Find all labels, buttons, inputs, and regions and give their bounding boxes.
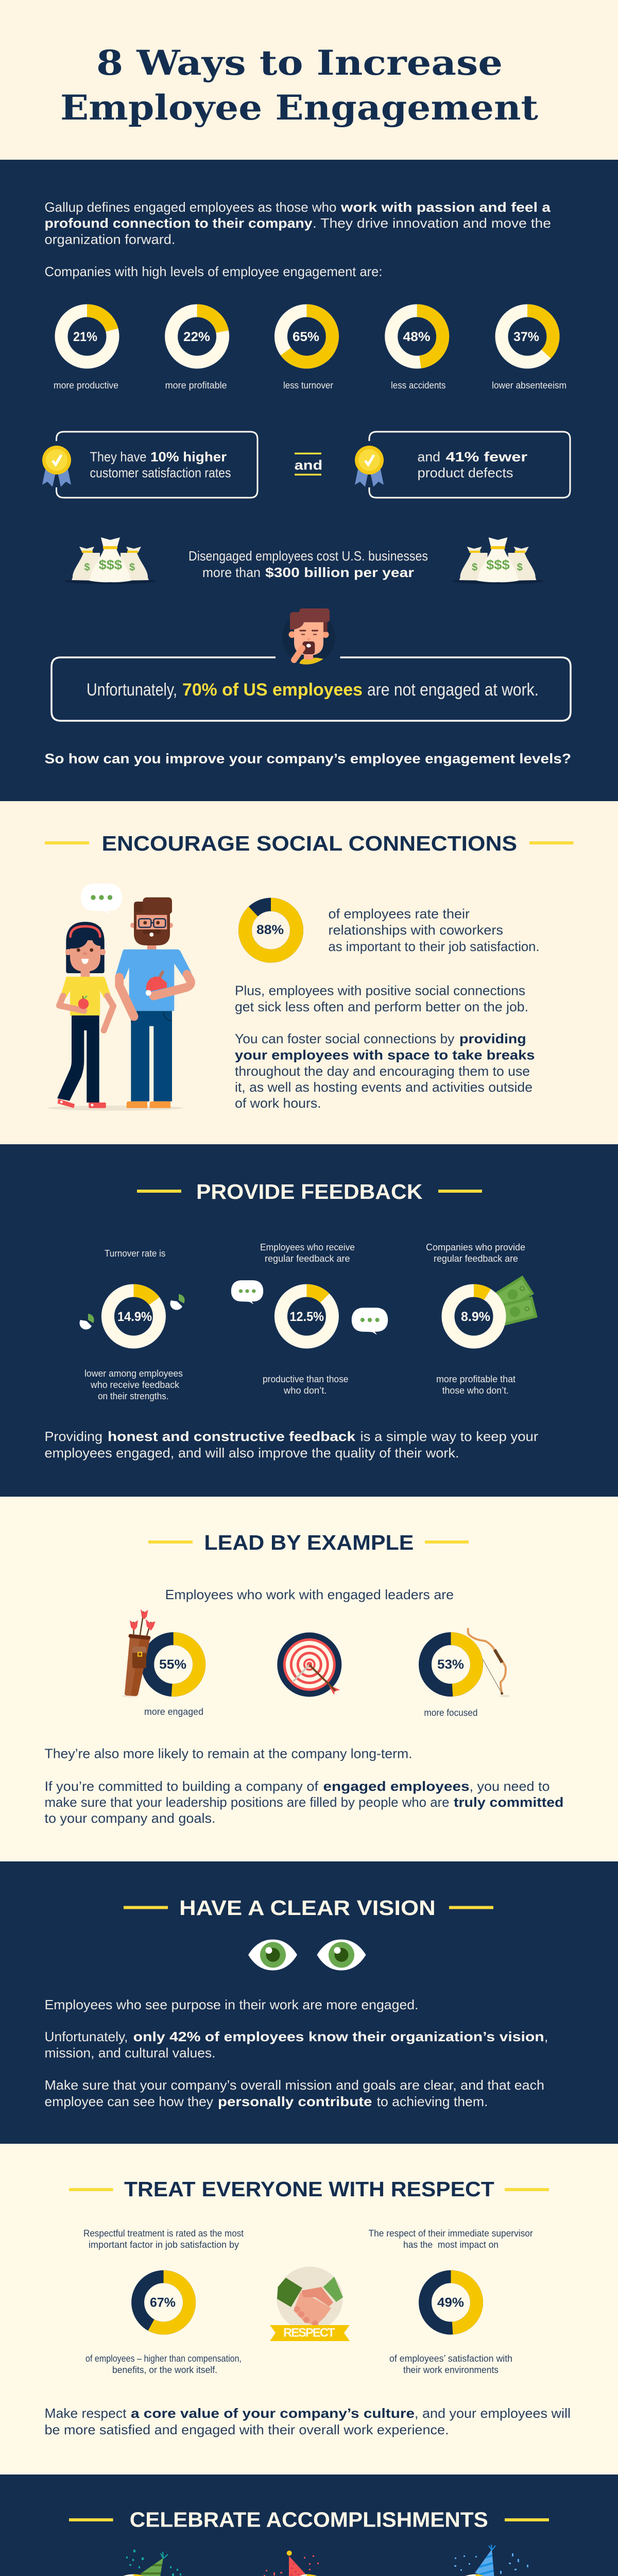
text block: feedback summary: Providing — [44, 1429, 102, 1444]
heading: HAVE A CLEAR VISION — [179, 1896, 436, 1920]
stat: 67% job satisfaction: benefits, or the work itself. — [112, 2365, 217, 2375]
intro text block: Gallup defines engaged employees as those who — [44, 199, 337, 215]
donut: 48% less accidents: less accidents — [391, 380, 446, 391]
icon: dollar bills — [491, 1276, 538, 1326]
panel: provide feedback — [0, 1144, 618, 1497]
donut: 65% less turnover: less turnover — [283, 380, 333, 391]
callout: 70% of US employees: 70% of US employees — [182, 680, 363, 700]
stat: 12.5% productive — [231, 1242, 388, 1396]
text block: social connections: as important to their job satisfaction. — [329, 939, 540, 954]
connector: and — [295, 452, 322, 476]
text block: respect summary: Make respect — [44, 2405, 127, 2421]
panel: introduction — [0, 160, 618, 801]
stat: 49% supervisor: their work environments — [403, 2365, 499, 2375]
woman — [57, 922, 113, 1108]
text block: vision: Employees who see purpose in their work are more engaged. — [44, 1997, 418, 2012]
text: cost of disengagement: $300 billion per year — [265, 565, 414, 580]
stat: 8.9% profitable: more profitable that — [436, 1374, 516, 1384]
stat: 67% job satisfaction: important factor in job satisfaction by — [89, 2240, 239, 2250]
stat: 49% supervisor: has the most impact on — [403, 2240, 499, 2250]
stat: 67% job satisfaction: of employees – higher than compensation, — [85, 2353, 242, 2364]
donut: 53% more focused: more focused — [424, 1708, 477, 1718]
donut: 21% more productive: 21% — [73, 330, 97, 344]
text block: respect summary: a core value of your company’s culture — [131, 2405, 415, 2421]
icon: small pie charts — [79, 1294, 185, 1330]
intro text block: organization forward. — [44, 232, 175, 247]
callout: 41% fewer product defects: product defects — [417, 465, 513, 480]
heading: PROVIDE FEEDBACK — [196, 1180, 423, 1204]
donut: 48% less accidents: 48% — [403, 330, 431, 344]
text block: vision: only 42% of employees know their organization’s vision — [133, 2029, 544, 2044]
donut: 55% more engaged: more engaged — [144, 1707, 203, 1717]
icon: money bags right — [452, 537, 544, 584]
stat: 14.9% turnover: lower among employees — [84, 1368, 183, 1379]
donut: 37% lower absenteeism — [492, 311, 566, 391]
donut: 22% more profitable — [165, 311, 227, 391]
intro text block: work with passion and feel a — [340, 199, 551, 215]
stat: 8.9% profitable: 8.9% — [461, 1310, 490, 1324]
heading — [148, 1531, 469, 1554]
text block: social connections: providing — [459, 1031, 526, 1046]
text block: vision — [44, 1997, 548, 2109]
text block: feedback summary: is a simple way to keep your — [360, 1429, 538, 1444]
text block: social connections: Plus, employees with positive social connections — [235, 983, 525, 998]
icon: blue party hat with confetti — [454, 2545, 528, 2576]
stat: 49% supervisor: The respect of their immediate supervisor — [369, 2228, 533, 2239]
icon: red party hat with confetti — [264, 2551, 319, 2576]
callout: 41% fewer product defects: 41% fewer — [446, 449, 527, 464]
heading: LEAD BY EXAMPLE — [204, 1531, 414, 1554]
text: intro line: Employees who work with engaged leaders are — [165, 1587, 454, 1602]
stat: 8.9% profitable: Companies who provide — [426, 1242, 525, 1252]
text block: respect summary — [44, 2405, 571, 2437]
icon: green party hat with confetti — [126, 2550, 181, 2576]
donut: 55% more engaged — [144, 1639, 203, 1717]
panel: have a clear vision — [0, 1861, 618, 2144]
stat: 8.9% profitable — [426, 1242, 538, 1396]
donut: 65% less turnover: 65% — [293, 330, 319, 344]
text block: social connections: of work hours. — [235, 1095, 321, 1111]
callout: 10% higher customer satisfaction: 10% higher — [150, 449, 227, 464]
text block: vision: Unfortunately, — [44, 2029, 128, 2044]
donut: 55% more engaged: 55% — [159, 1657, 186, 1672]
stat: 8.9% profitable: those who don’t. — [442, 1385, 509, 1396]
title: Employee Engagement — [60, 88, 539, 128]
stat: 14.9% turnover: 14.9% — [117, 1310, 152, 1324]
man — [115, 897, 192, 1108]
text: cost of disengagement: Disengaged employees cost U.S. businesses — [188, 548, 428, 564]
title: 8 Ways to Increase — [96, 43, 503, 83]
stat: 14.9% turnover: Turnover rate is — [105, 1248, 165, 1259]
intro text block: . They drive innovation and move the — [313, 215, 551, 231]
stat: 49% supervisor: 49% — [437, 2296, 464, 2310]
callout: 41% fewer product defects — [355, 432, 570, 498]
intro text block — [44, 199, 551, 279]
donut: 88% — [245, 905, 297, 956]
text block: vision: , — [544, 2029, 548, 2044]
heading — [137, 1180, 482, 1204]
donut: 22% more profitable: 22% — [183, 330, 210, 344]
text block: vision: Make sure that your company’s overall mission and goals are clear, and that each — [44, 2077, 544, 2093]
stat: 94% — [123, 2550, 181, 2576]
callout: 10% higher customer satisfaction: They have — [90, 449, 146, 464]
stat: 89% — [246, 2551, 365, 2576]
text block: leadership: make sure that your leadership positions are filled by people who are — [44, 1794, 449, 1810]
heading — [124, 1896, 493, 1920]
stat: 8.9% profitable: regular feedback are — [434, 1253, 518, 1264]
panel: title banner — [0, 0, 618, 160]
text block: vision: to achieving them. — [377, 2094, 488, 2109]
donut: 65% less turnover — [281, 311, 333, 391]
donut: 88%: 88% — [256, 923, 284, 937]
icon: money bags left: $$$ — [99, 557, 123, 572]
icon: medal — [42, 446, 71, 487]
text block: leadership: If you’re committed to building a company of — [44, 1778, 319, 1794]
callout: 10% higher customer satisfaction: customer satisfaction rates — [90, 465, 231, 480]
text block: social connections: your employees with space to take breaks — [235, 1047, 535, 1063]
text block: respect summary: , and your employees will — [415, 2405, 571, 2421]
callout: 70% of US employees — [52, 657, 571, 721]
text: cost of disengagement: more than — [202, 565, 261, 580]
callout: 70% of US employees: Unfortunately, — [87, 680, 177, 700]
stat: 74% — [454, 2544, 528, 2576]
illustration: two coworkers talking — [47, 884, 192, 1111]
text block: leadership — [44, 1746, 563, 1826]
icon: money bags left: $ — [129, 562, 135, 573]
text block: leadership: truly committed — [454, 1794, 563, 1810]
text block: social connections: relationships with coworkers — [329, 922, 503, 938]
icon: quiver of arrows — [122, 1609, 156, 1697]
heading: CELEBRATE ACCOMPLISHMENTS — [130, 2508, 488, 2532]
icon: thinking man — [282, 608, 335, 665]
text block: feedback summary — [44, 1429, 538, 1461]
icon: left eye — [248, 1939, 297, 1970]
text block: vision: personally contribute — [218, 2094, 372, 2109]
donut: 37% lower absenteeism: lower absenteeism — [492, 380, 566, 391]
icon: handshake with respect ribbon: RESPECT — [283, 2326, 335, 2340]
text block: social connections: get sick less often and perform better on the job. — [235, 999, 528, 1014]
text block: social connections: throughout the day and encouraging them to use — [235, 1063, 530, 1079]
panel: treat everyone with respect — [0, 2144, 618, 2475]
donut: 37% lower absenteeism: 37% — [513, 330, 539, 344]
icon: medal — [355, 446, 384, 487]
title — [60, 43, 539, 128]
icon: handshake with respect ribbon — [270, 2267, 350, 2341]
stat: 12.5% productive: 12.5% — [289, 1310, 324, 1324]
text block: feedback summary: employees engaged, and will also improve the quality of their work. — [44, 1445, 459, 1461]
text block: leadership: engaged employees — [323, 1778, 470, 1794]
icon: money bags right: $ — [517, 562, 523, 573]
stat: 14.9% turnover — [79, 1248, 185, 1401]
text block: vision: mission, and cultural values. — [44, 2045, 215, 2060]
heading: ENCOURAGE SOCIAL CONNECTIONS — [102, 832, 517, 855]
callout: 10% higher customer satisfaction — [42, 432, 258, 498]
text block: feedback summary: honest and constructive feedback — [108, 1429, 356, 1444]
donut: 22% more profitable: more profitable — [165, 380, 227, 391]
intro text block: profound connection to their company — [44, 215, 313, 231]
donut: 48% less accidents — [391, 311, 446, 391]
text block: social connections — [235, 906, 540, 1111]
panel: lead by example — [0, 1497, 618, 1861]
text block: social connections: it, as well as hosting events and activities outside — [235, 1079, 533, 1095]
icon: money bags right: $ — [472, 562, 477, 573]
stat: 12.5% productive: Employees who receive — [260, 1242, 355, 1252]
stat: 14.9% turnover: on their strengths. — [98, 1391, 169, 1401]
icon: bow — [468, 1628, 510, 1697]
panel: celebrate accomplishments — [0, 2475, 618, 2576]
closing question: So how can you improve your company’s employee engagement levels? — [44, 751, 571, 767]
callout: 41% fewer product defects: and — [417, 449, 440, 464]
text block: social connections: You can foster social connections by — [235, 1031, 454, 1046]
icon: money bags left — [64, 537, 156, 584]
intro text block: Companies with high levels of employee engagement are: — [44, 264, 382, 279]
text block: leadership: , you need to — [470, 1778, 550, 1794]
donut: 53% more focused — [424, 1639, 477, 1718]
icon: target with arrow — [277, 1632, 341, 1697]
stat: 49% supervisor — [369, 2228, 533, 2375]
panel: encourage social connections — [0, 801, 618, 1144]
icon: right eye — [317, 1939, 366, 1970]
text block: leadership: to your company and goals. — [44, 1810, 215, 1826]
stat: 49% supervisor: of employees’ satisfaction with — [389, 2353, 512, 2364]
stat: 12.5% productive: who don’t. — [283, 1385, 327, 1396]
donut: 21% more productive: more productive — [54, 380, 118, 391]
icon: speech bubbles — [231, 1280, 388, 1335]
connector: and: and — [295, 457, 322, 473]
icon: money bags right: $$$ — [486, 557, 510, 572]
stat: 14.9% turnover: who receive feedback — [90, 1380, 180, 1390]
stat: 12.5% productive: productive than those — [263, 1374, 348, 1384]
callout: 70% of US employees: are not engaged at work. — [367, 680, 539, 700]
text block: vision: employee can see how they — [44, 2094, 213, 2109]
text block: respect summary: be more satisfied and engaged with their overall work experience. — [44, 2422, 449, 2437]
text block: leadership: They’re also more likely to remain at the company long-term. — [44, 1746, 412, 1761]
stat: 67% job satisfaction: 67% — [150, 2296, 176, 2310]
icon: money bags left: $ — [84, 562, 90, 573]
text block: social connections: of employees rate their — [329, 906, 470, 922]
icon: speech bubble — [81, 884, 122, 914]
donut: 21% more productive — [54, 311, 118, 391]
heading: TREAT EVERYONE WITH RESPECT — [124, 2177, 494, 2201]
text: cost of disengagement — [188, 548, 428, 580]
stat: 67% job satisfaction: Respectful treatment is rated as the most — [83, 2228, 244, 2239]
donut: 53% more focused: 53% — [437, 1657, 464, 1672]
stat: 67% job satisfaction — [83, 2228, 244, 2375]
stat: 12.5% productive: regular feedback are — [265, 1253, 350, 1264]
